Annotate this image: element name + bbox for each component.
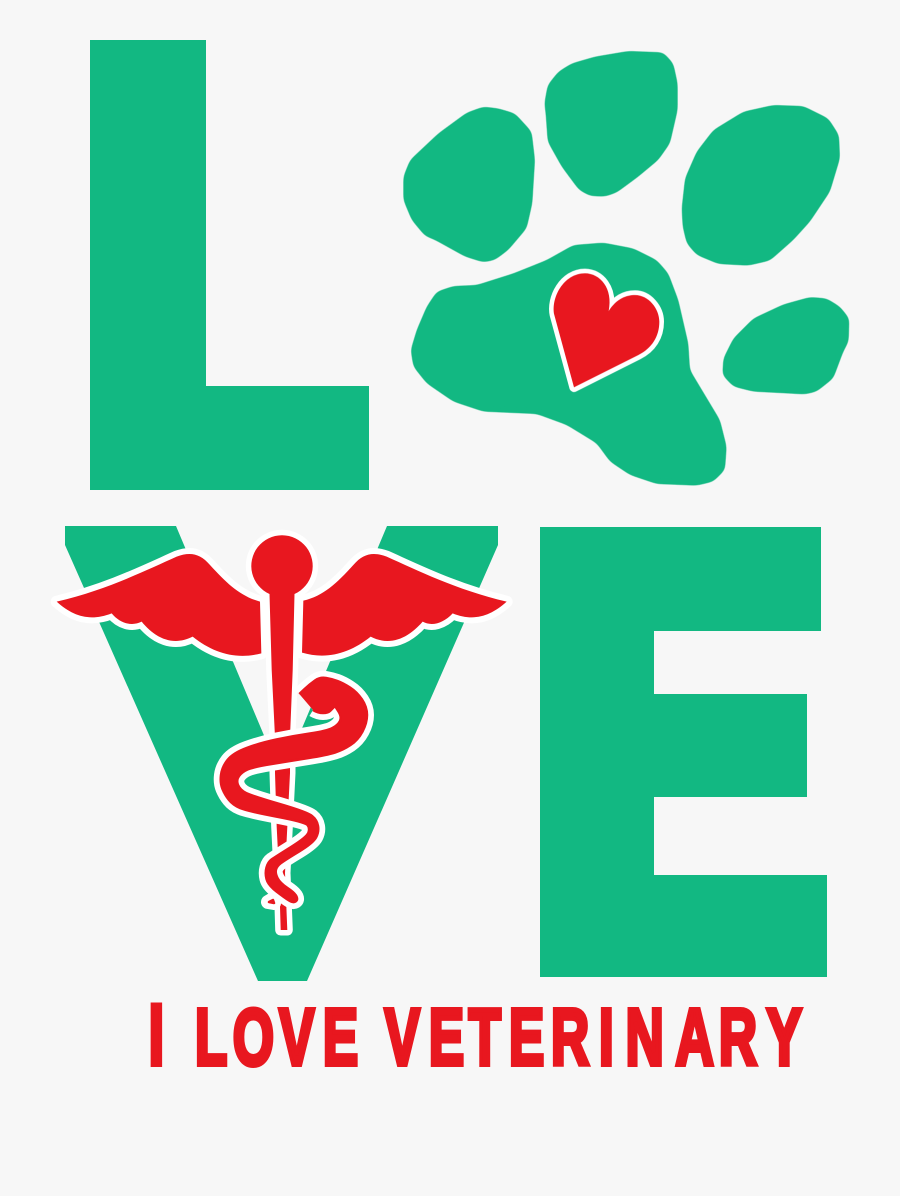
caduceus snake bbox=[221, 678, 367, 903]
caduceus wings bbox=[57, 554, 507, 656]
paw left toe bbox=[403, 107, 535, 262]
paw small toe bbox=[722, 297, 849, 394]
letter L bbox=[90, 40, 369, 490]
caduceus staff and ball bbox=[251, 535, 313, 930]
icon: caduceus bbox=[57, 535, 507, 930]
letter V bbox=[65, 526, 498, 981]
icon: red heart bbox=[554, 273, 659, 387]
paw right toe bbox=[682, 105, 840, 266]
snake red body bbox=[221, 678, 367, 903]
icon: paw print bbox=[403, 51, 849, 486]
tagline words: LOVE VETERINARY bbox=[195, 994, 802, 1082]
paw main pad bbox=[411, 243, 727, 486]
snake white outline bbox=[221, 678, 367, 903]
tagline letter I: I bbox=[149, 988, 164, 1083]
tagline: I LOVE VETERINARY bbox=[148, 988, 802, 1083]
letter E bbox=[540, 527, 827, 977]
paw top toe bbox=[544, 51, 678, 197]
